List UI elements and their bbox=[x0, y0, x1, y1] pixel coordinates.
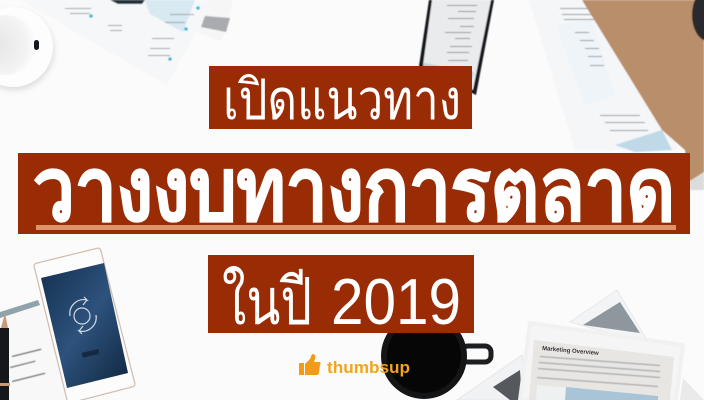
underline bbox=[36, 225, 676, 230]
photo: coffee cup lid bbox=[0, 7, 54, 90]
photo: phone bottom left with notebook and pen bbox=[0, 251, 132, 400]
logo text: thumbsup bbox=[327, 358, 410, 377]
photo: black mug bbox=[381, 313, 491, 399]
photo: papers top left bbox=[20, 0, 233, 85]
photo: documents and folder top right bbox=[529, 0, 704, 190]
photo: tablet on papers bottom right: Marketing Overview bbox=[542, 346, 599, 357]
heading: top line: เปิดแนวทาง bbox=[223, 68, 461, 131]
photo: tablet on papers bottom right bbox=[457, 290, 704, 400]
heading: bottom line: 2019 bbox=[331, 265, 461, 338]
photo: phone top bbox=[419, 0, 494, 95]
icon: sync arrows bbox=[70, 297, 96, 334]
icon: thumb bbox=[299, 354, 321, 375]
logo: thumbsup bbox=[299, 354, 410, 377]
banner: bottom bbox=[208, 255, 474, 338]
heading: bottom line: ในปี bbox=[222, 265, 312, 338]
banner: middle bbox=[18, 140, 690, 239]
banner: top bbox=[209, 66, 472, 131]
